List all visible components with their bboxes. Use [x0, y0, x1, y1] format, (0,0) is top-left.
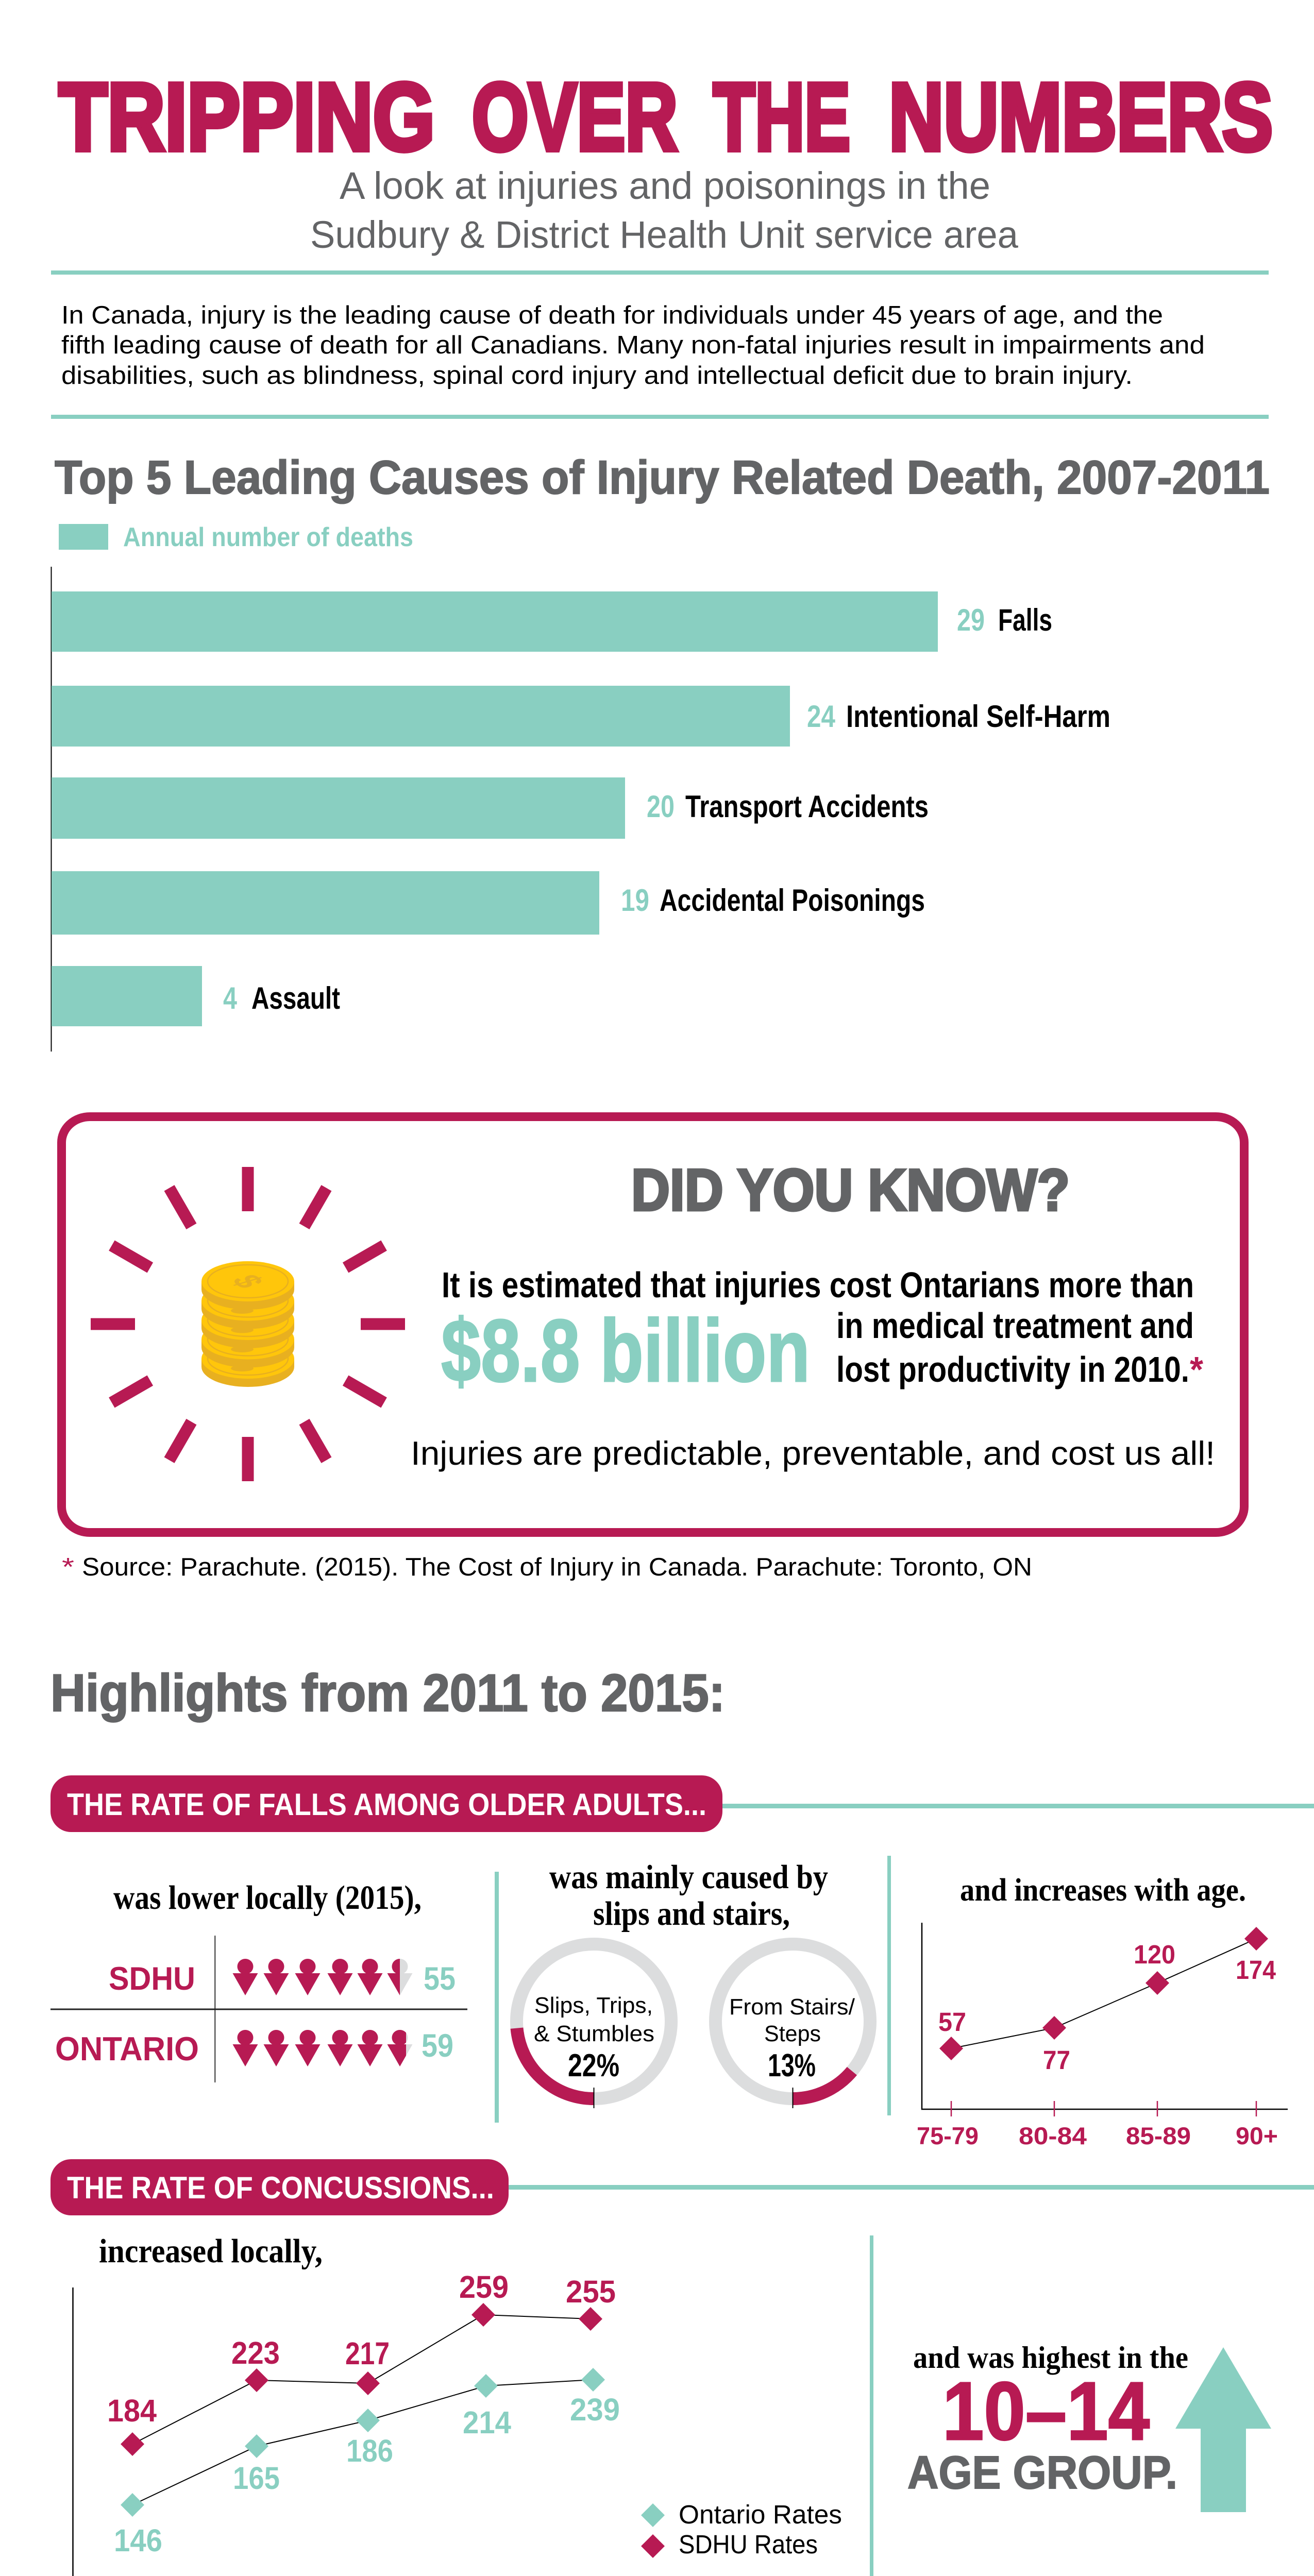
donut: from stairs 13% — [715, 1944, 870, 2108]
series: Ontario: 239 — [570, 2392, 620, 2427]
intro paragraph — [61, 301, 1205, 389]
text: cost statement: lost productivity in 2010. — [836, 1349, 1189, 1389]
chart legend: Annual number of deaths — [123, 522, 413, 552]
subtitle: A look at injuries and poisonings in the — [340, 164, 990, 207]
panel: falls lower locally — [50, 1879, 467, 2082]
bar: intentional self-harm: 24 — [807, 699, 836, 734]
heading: slips and stairs, — [593, 1895, 790, 1933]
section banner: falls: THE RATE OF FALLS AMONG OLDER ADULTS... — [67, 1787, 706, 1822]
donut: slips trips stumbles 22%: Slips, Trips, — [534, 1993, 653, 2018]
section banner: concussions — [50, 2159, 1314, 2215]
series: SDHU: 217 — [345, 2336, 390, 2371]
subtitle — [310, 164, 1019, 256]
big number: cost: $8.8 billion — [441, 1301, 810, 1400]
tagline: Injuries are predictable, preventable, and cost us all! — [411, 1434, 1215, 1472]
callout: concussions age group: 10–14 — [942, 2365, 1150, 2457]
line chart: age: 57 — [938, 2007, 966, 2037]
donut: from stairs 13%: 13% — [768, 2048, 816, 2083]
bar: falls: 29 — [957, 603, 985, 637]
series: Ontario: 186 — [346, 2433, 393, 2468]
donut: slips trips stumbles 22% — [516, 1944, 671, 2108]
arrow: up — [1175, 2347, 1271, 2512]
panel: falls causes — [516, 1858, 870, 2108]
text: cost statement: * — [1190, 1349, 1204, 1389]
title — [59, 64, 1273, 171]
intro paragraph: In Canada, injury is the leading cause of death for individuals under 45 years of age, and the — [61, 301, 1163, 329]
bar: transport accidents — [52, 777, 929, 839]
bar: falls: Falls — [998, 603, 1052, 637]
text: cost statement: in medical treatment and — [836, 1306, 1194, 1346]
callout: concussions age group: and was highest in the — [913, 2341, 1188, 2375]
line chart: age — [917, 1923, 1288, 2149]
section banner: concussions: THE RATE OF CONCUSSIONS... — [67, 2171, 494, 2205]
heading: highlights: Highlights from 2011 to 2015: — [50, 1664, 725, 1722]
row: SDHU: 55 — [424, 1961, 456, 1997]
chart legend: SDHU Rates — [679, 2530, 818, 2559]
line chart: age: 174 — [1236, 1955, 1276, 1985]
line chart: age: 75-79 — [917, 2122, 979, 2149]
line chart: age: 90+ — [1236, 2122, 1278, 2149]
line chart: age: 77 — [1043, 2045, 1070, 2075]
heading: and increases with age. — [960, 1873, 1246, 1908]
heading: top 5 causes: Top 5 Leading Causes of Injury Related Death, 2007-2011 — [55, 451, 1270, 504]
bar: transport accidents: Transport Accidents — [685, 789, 929, 824]
donut: from stairs 13%: Steps — [764, 2021, 821, 2046]
bar: assault — [52, 966, 340, 1026]
heading: increased locally: increased locally, — [99, 2232, 323, 2270]
title: OVER — [472, 64, 678, 171]
source note: * — [62, 1553, 74, 1581]
bar: intentional self-harm — [52, 686, 1110, 747]
row: Ontario — [55, 2028, 453, 2067]
series: Ontario — [114, 2368, 620, 2558]
panel: falls by age — [917, 1873, 1288, 2149]
chart legend — [641, 2500, 842, 2559]
intro paragraph: disabilities, such as blindness, spinal cord injury and intellectual deficit due to brain injury. — [61, 362, 1133, 389]
heading — [549, 1858, 828, 1933]
intro paragraph: fifth leading cause of death for all Canadians. Many non-fatal injuries result in impairments and — [61, 331, 1205, 359]
row: SDHU — [109, 1959, 456, 1997]
bar: falls — [52, 591, 1052, 652]
bar: transport accidents: 20 — [647, 789, 675, 824]
bar: assault: 4 — [223, 981, 238, 1015]
series: SDHU: 223 — [231, 2335, 280, 2370]
source note: Source: Parachute. (2015). The Cost of Injury in Canada. Parachute: Toronto, ON — [82, 1553, 1032, 1581]
bar: assault: Assault — [251, 981, 340, 1015]
line chart: age: 80-84 — [1019, 2122, 1087, 2149]
title: THE — [713, 64, 850, 171]
panel: did you know — [62, 1117, 1244, 1532]
series: SDHU: 184 — [107, 2393, 157, 2428]
chart legend: Ontario Rates — [679, 2500, 842, 2529]
icon: coin stack: $ — [224, 1271, 272, 1292]
donut: slips trips stumbles 22%: 22% — [568, 2048, 619, 2083]
callout: concussions age group — [907, 2341, 1271, 2512]
section banner: falls — [50, 1775, 1314, 1832]
series: Ontario: 165 — [233, 2461, 280, 2496]
line chart: age: 120 — [1134, 1940, 1175, 1969]
icon: coin stack — [201, 1261, 294, 1387]
series: SDHU: 255 — [566, 2274, 616, 2309]
row: SDHU: SDHU — [109, 1961, 195, 1997]
series: SDHU — [107, 2269, 616, 2456]
subtitle: Sudbury & District Health Unit service area — [310, 213, 1019, 256]
line chart: concussion rates — [73, 2269, 842, 2576]
icon: burst rays — [91, 1167, 405, 1481]
line chart: age: 85-89 — [1126, 2122, 1191, 2149]
donut: slips trips stumbles 22%: & Stumbles — [534, 2021, 654, 2046]
donut: from stairs 13%: From Stairs/ — [729, 1994, 855, 2020]
bar: intentional self-harm: Intentional Self-Harm — [846, 699, 1110, 734]
row: Ontario: 59 — [422, 2028, 453, 2064]
heading: was mainly caused by — [549, 1858, 828, 1896]
bar: accidental poisonings: Accidental Poisonings — [660, 883, 925, 918]
bar: accidental poisonings: 19 — [621, 883, 649, 918]
series: Ontario: 214 — [463, 2405, 511, 2440]
bar: accidental poisonings — [52, 871, 925, 935]
bar chart: leading causes — [50, 567, 1110, 1052]
row: Ontario: ONTARIO — [55, 2030, 199, 2067]
title: TRIPPING — [59, 64, 435, 171]
heading: was lower locally (2015), — [113, 1879, 422, 1917]
series: Ontario: 146 — [114, 2523, 162, 2558]
heading: did you know: DID YOU KNOW? — [631, 1158, 1070, 1223]
text: cost statement — [442, 1265, 1204, 1389]
callout: concussions age group: AGE GROUP. — [907, 2447, 1177, 2499]
series: SDHU: 259 — [459, 2269, 509, 2304]
